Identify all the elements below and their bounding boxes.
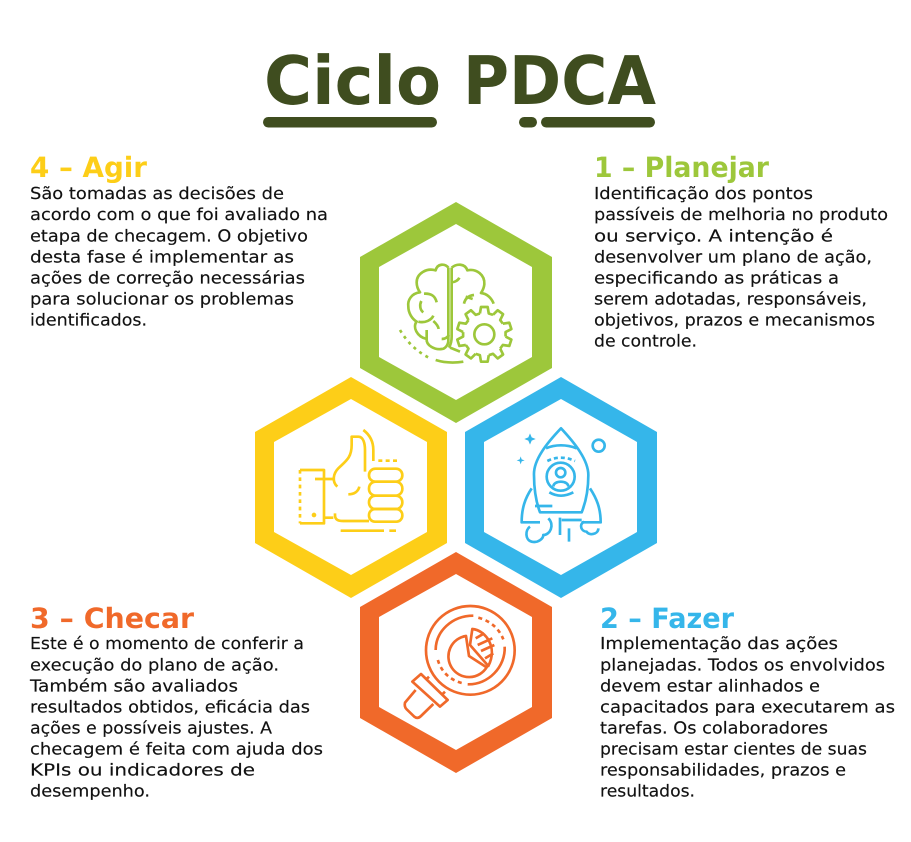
panel: 4 Agir text: desta fase é implementar as <box>30 248 294 266</box>
panel: 3 Checar text: checagem é feita com ajuda dos <box>30 740 323 758</box>
panel: 1 Planejar text: de controle. <box>594 332 697 350</box>
panel: 4 Agir text <box>30 151 328 330</box>
icon: brain and gear <box>400 265 513 363</box>
title <box>263 42 656 128</box>
panel: 4 Agir text: São tomadas as decisões de <box>30 184 284 203</box>
panel: 1 Planejar text: 1 – Planejar <box>594 151 769 184</box>
panel: 1 Planejar text: especificando as práticas a <box>594 268 839 288</box>
panel: 1 Planejar text: objetivos, prazos e mecanismos <box>594 310 875 330</box>
panel: 2 Fazer text: responsabilidades, prazos e <box>600 760 846 780</box>
hexagon: blue, fazer <box>465 377 657 598</box>
panel: 1 Planejar text: desenvolver um plano de ação, <box>594 248 872 266</box>
panel: 3 Checar text: ações e possíveis ajustes. A <box>30 718 273 738</box>
hexagon: green, planejar <box>360 202 552 423</box>
panel: 3 Checar text <box>29 602 323 800</box>
panel: 1 Planejar text: passíveis de melhoria no produto <box>594 205 888 224</box>
panel: 2 Fazer text: devem estar alinhados e <box>600 676 820 696</box>
panel: 3 Checar text: desempenho. <box>30 782 150 800</box>
panel: 2 Fazer text: resultados. <box>600 782 695 800</box>
panel: 1 Planejar text: ou serviço. A intenção é <box>594 226 833 246</box>
panel: 3 Checar text: 3 – Checar <box>30 602 194 635</box>
panel: 3 Checar text: Este é o momento de conferir a <box>30 634 304 653</box>
hexagon: orange, checar <box>360 552 552 773</box>
panel: 4 Agir text: ações de correção necessárias <box>30 268 305 288</box>
title: Ciclo <box>264 42 441 120</box>
panel: 3 Checar text: execução do plano de ação. <box>30 656 279 674</box>
hexagon: yellow, agir <box>255 377 447 598</box>
panel: 2 Fazer text <box>600 602 895 800</box>
panel: 2 Fazer text: planejadas. Todos os envolvidos <box>600 656 885 674</box>
panel: 3 Checar text: KPIs ou indicadores de <box>30 760 255 780</box>
panel: 2 Fazer text: tarefas. Os colaboradores <box>600 718 828 738</box>
icon: thumbs up <box>300 430 402 531</box>
panel: 4 Agir text: para solucionar os problemas <box>30 290 294 308</box>
title: PDCA <box>463 42 656 120</box>
icon: rocket <box>517 428 605 542</box>
panel: 1 Planejar text: serem adotadas, responsáveis, <box>594 290 867 308</box>
panel: 4 Agir text: 4 – Agir <box>30 151 147 184</box>
panel: 1 Planejar text: Identificação dos pontos <box>594 184 813 203</box>
panel: 3 Checar text: Também são avaliados <box>29 676 238 696</box>
panel: 2 Fazer text: precisam estar cientes de suas <box>600 740 867 758</box>
panel: 2 Fazer text: 2 – Fazer <box>600 602 734 635</box>
panel: 4 Agir text: etapa de checagem. O objetivo <box>30 226 308 246</box>
panel: 3 Checar text: resultados obtidos, eficácia das <box>30 698 310 716</box>
icon: magnifier with pie chart <box>405 606 515 718</box>
panel: 4 Agir text: identificados. <box>30 310 147 330</box>
panel: 1 Planejar text <box>594 151 888 350</box>
panel: 2 Fazer text: Implementação das ações <box>600 634 838 653</box>
panel: 2 Fazer text: capacitados para executarem as <box>600 698 895 716</box>
panel: 4 Agir text: acordo com o que foi avaliado na <box>30 205 328 224</box>
